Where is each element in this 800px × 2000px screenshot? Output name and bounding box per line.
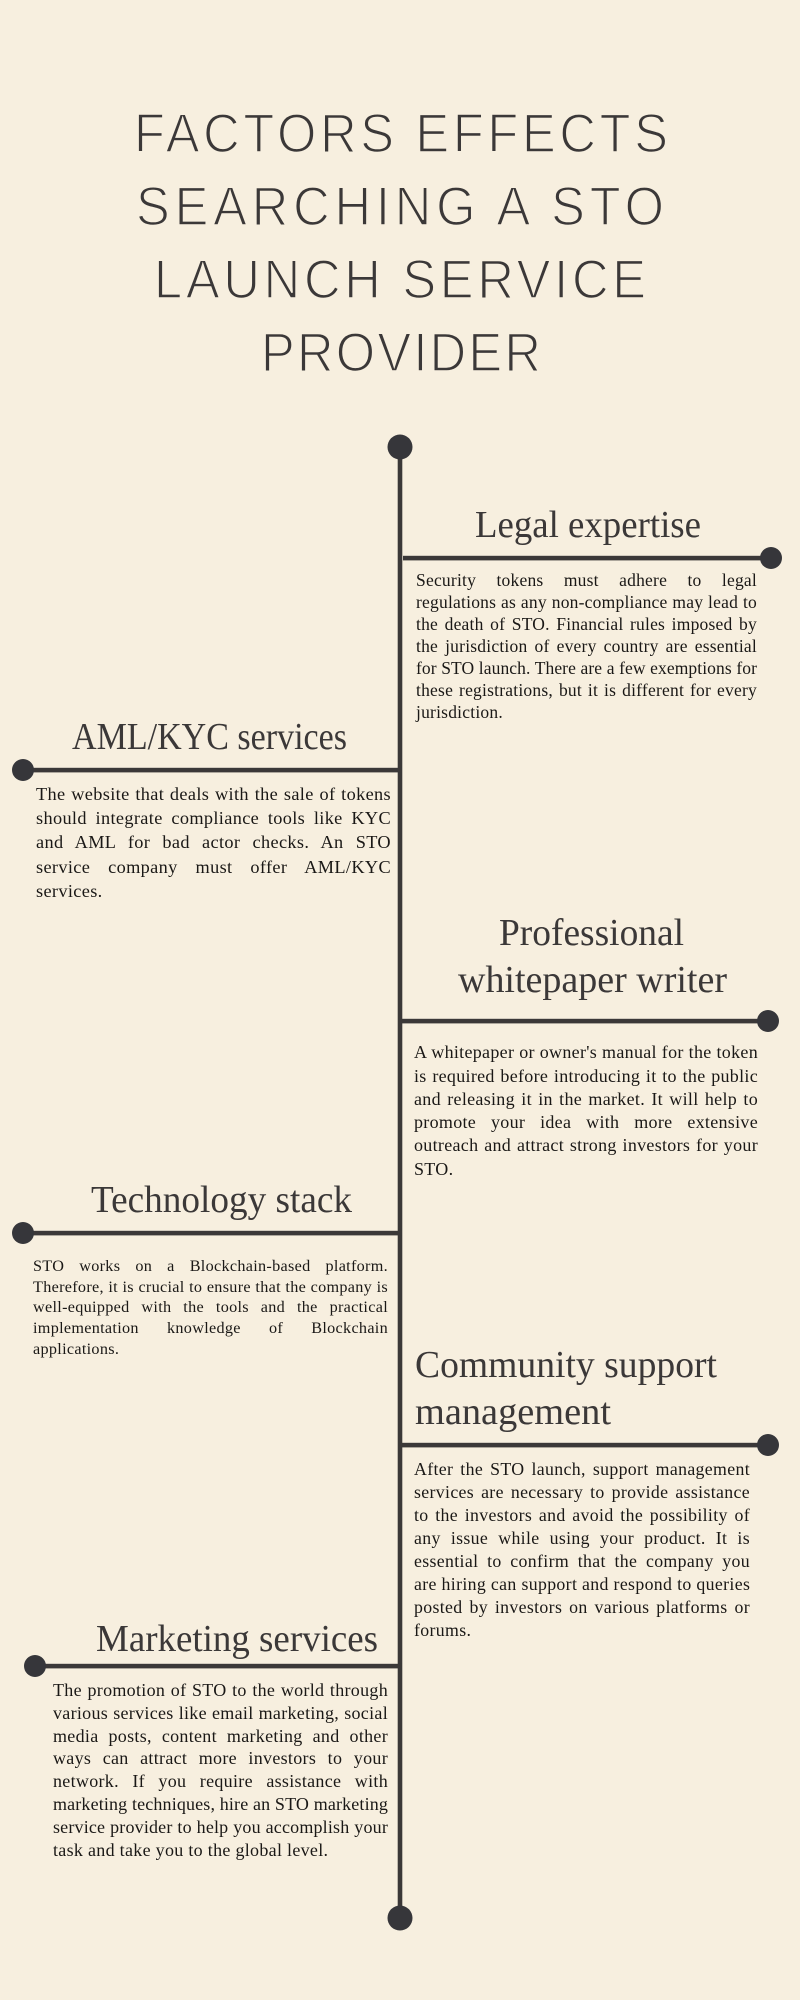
text: community support management: forums. [414, 1620, 471, 1640]
heading and connector: community support management: management [415, 1391, 611, 1433]
text: community support management: essential to confirm that the company you [414, 1550, 750, 1570]
heading and connector: professional whitepaper writer [402, 912, 779, 1032]
text: legal expertise: the jurisdiction of every country are essential [416, 636, 757, 656]
text: legal expertise: these registrations, but it is different for every [416, 680, 757, 700]
text: marketing services: various services like email marketing, social [53, 1703, 388, 1723]
title: LAUNCH SERVICE [154, 249, 646, 310]
text: community support management: to the investors and avoid the possibility of [414, 1504, 750, 1524]
heading and connector: AML/KYC services [12, 716, 398, 781]
text: technology stack: STO works on a Blockchain-based platform. [33, 1257, 388, 1275]
text: professional whitepaper writer: outreach and attract strong investors for your [414, 1135, 758, 1155]
text: technology stack: applications. [33, 1340, 119, 1358]
text: marketing services: media posts, content marketing and other [53, 1726, 388, 1746]
central timeline [388, 434, 412, 1930]
panel: community support management [402, 1344, 779, 1640]
text: marketing services: network. If you require assistance with [53, 1771, 388, 1791]
heading and connector: AML/KYC services: AML/KYC services [72, 716, 347, 758]
text: legal expertise [416, 570, 757, 722]
text: legal expertise: jurisdiction. [416, 702, 503, 722]
heading and connector: community support management: Community support [415, 1344, 717, 1386]
text: AML/KYC services: should integrate compliance tools like KYC [36, 808, 391, 828]
text: professional whitepaper writer: is required before introducing it to the public [414, 1066, 758, 1086]
text: AML/KYC services: The website that deals with the sale of tokens [36, 784, 391, 804]
text: marketing services: ways can attract more investors to your [53, 1748, 388, 1768]
text: marketing services: task and take you to the global level. [53, 1840, 328, 1860]
text: professional whitepaper writer: A whitepaper or owner's manual for the token [414, 1042, 758, 1062]
text: technology stack [33, 1257, 388, 1358]
heading and connector: marketing services [24, 1618, 398, 1677]
heading and connector: technology stack [12, 1179, 398, 1244]
text: technology stack: Therefore, it is crucial to ensure that the company is [33, 1278, 388, 1296]
panel: marketing services [24, 1618, 398, 1860]
text: professional whitepaper writer [414, 1042, 758, 1179]
heading and connector: technology stack: Technology stack [91, 1179, 352, 1221]
text: professional whitepaper writer: and releasing it in the market. It will help to [414, 1089, 758, 1109]
title: PROVIDER [261, 322, 541, 383]
heading and connector: professional whitepaper writer: whitepaper writer [458, 959, 727, 1001]
text: community support management: are hiring can support and respond to queries [414, 1574, 750, 1594]
heading and connector: professional whitepaper writer: Professional [499, 912, 684, 954]
text: legal expertise: regulations as any non-compliance may lead to [416, 592, 757, 612]
text: AML/KYC services [36, 784, 391, 901]
title: FACTORS EFFECTS [134, 103, 668, 164]
title [134, 103, 668, 383]
text: legal expertise: the death of STO. Financial rules imposed by [416, 614, 757, 634]
text: legal expertise: for STO launch. There are a few exemptions for [416, 658, 757, 678]
text: marketing services: marketing techniques, hire an STO marketing [53, 1794, 388, 1814]
panel: legal expertise [403, 504, 782, 722]
text: community support management: posted by investors on various platforms or [414, 1596, 750, 1616]
text: legal expertise: Security tokens must adhere to legal [416, 570, 757, 590]
text: community support management [414, 1458, 750, 1640]
title: SEARCHING A STO [136, 176, 664, 237]
heading and connector: community support management [402, 1344, 779, 1456]
panel: professional whitepaper writer [402, 912, 779, 1179]
heading and connector: legal expertise [403, 504, 782, 569]
text: community support management: After the STO launch, support management [414, 1458, 750, 1478]
heading and connector: legal expertise: Legal expertise [475, 504, 701, 546]
text: AML/KYC services: services. [36, 881, 103, 901]
text: professional whitepaper writer: promote your idea with more extensive [414, 1112, 758, 1132]
text: marketing services [53, 1680, 388, 1860]
text: community support management: any issue while using your product. It is [414, 1528, 750, 1548]
text: marketing services: The promotion of STO to the world through [53, 1680, 388, 1700]
text: AML/KYC services: service company must offer AML/KYC [36, 857, 391, 877]
text: AML/KYC services: and AML for bad actor checks. An STO [36, 832, 391, 852]
text: marketing services: service provider to help you accomplish your [53, 1817, 388, 1837]
panel: technology stack [12, 1179, 398, 1358]
text: community support management: services are necessary to provide assistance [414, 1482, 750, 1502]
text: professional whitepaper writer: STO. [414, 1159, 453, 1179]
heading and connector: marketing services: Marketing services [96, 1618, 378, 1660]
text: technology stack: well-equipped with the tools and the practical [33, 1298, 388, 1316]
text: technology stack: implementation knowledge of Blockchain [33, 1319, 388, 1337]
panel: AML/KYC services [12, 716, 398, 901]
